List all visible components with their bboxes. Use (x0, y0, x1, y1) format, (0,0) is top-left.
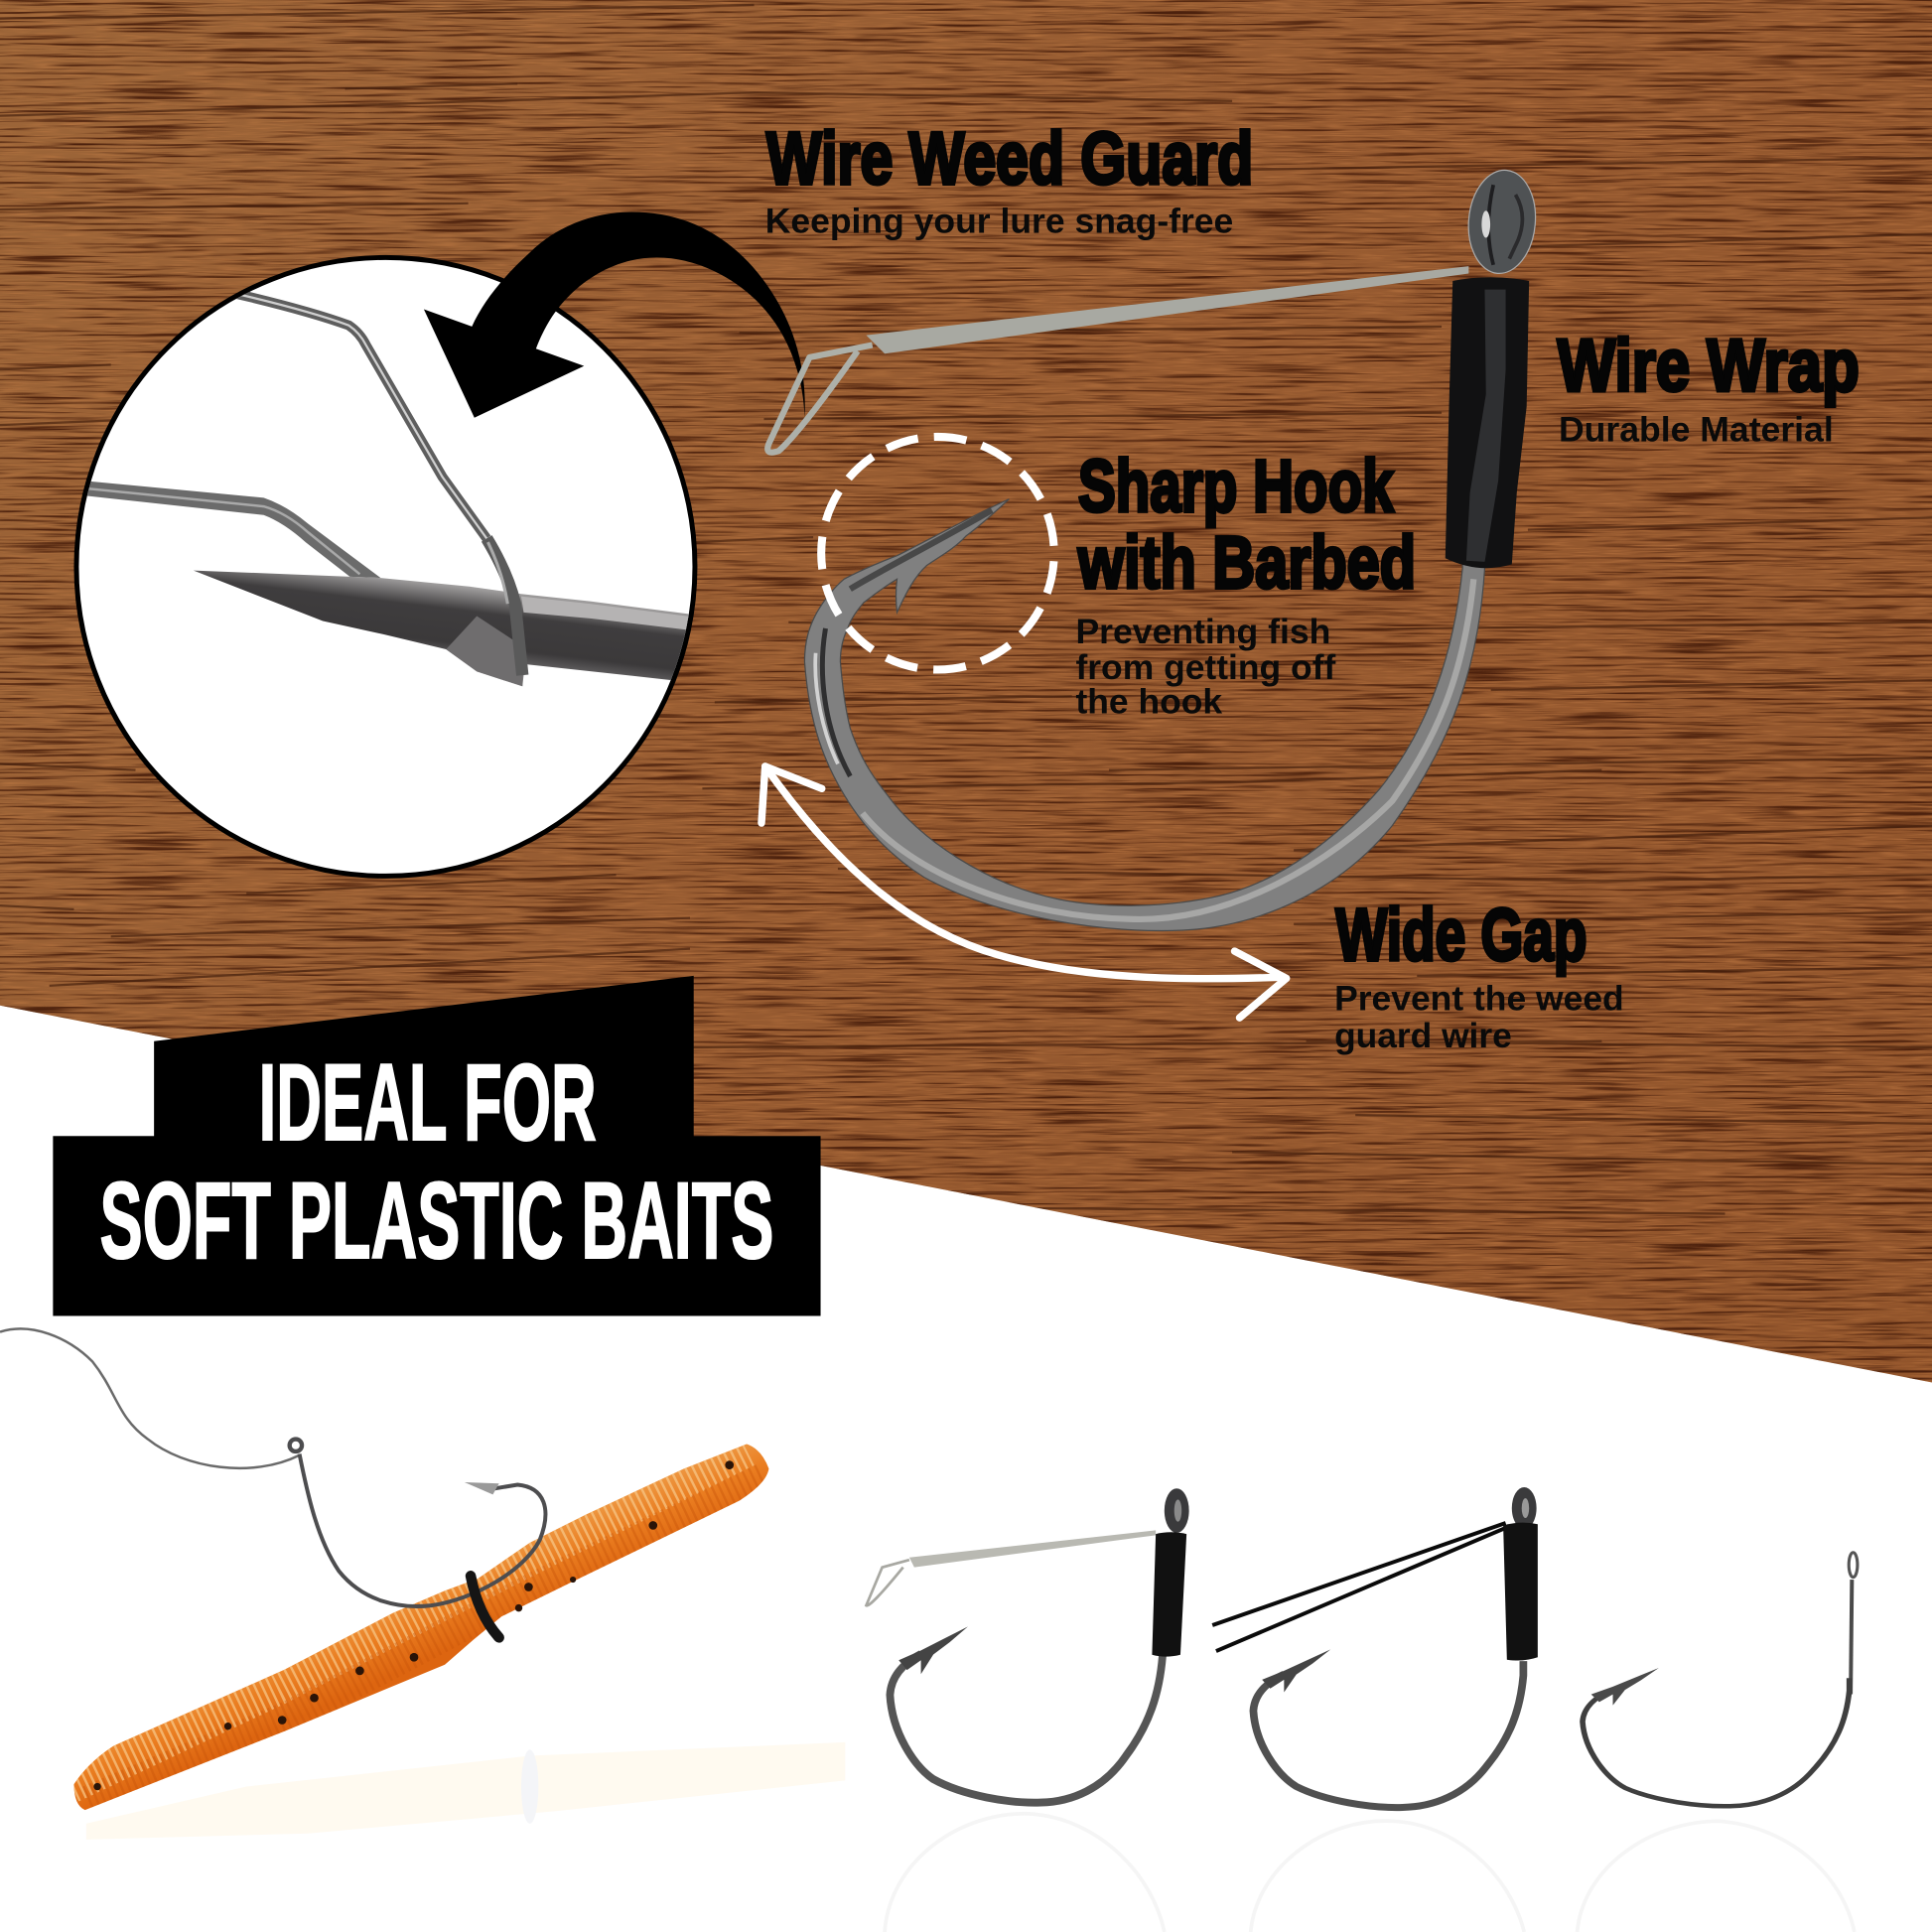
label: wide gap: Wide Gap (1335, 894, 1587, 976)
label: wide gap (1334, 894, 1624, 1055)
label: wide gap: guard wire (1334, 1017, 1512, 1055)
banner: ideal for soft plastic baits (53, 976, 821, 1315)
icon: hook bend (804, 499, 1484, 931)
white double-headed arrow: wide gap (761, 766, 1287, 1018)
label: sharp hook with barbed (1075, 445, 1416, 722)
label: sharp hook with barbed: the hook (1075, 683, 1222, 722)
icon: black wire wrap (1446, 277, 1529, 568)
main hook with wire weed guard (767, 168, 1540, 931)
label: wire weed guard (765, 117, 1253, 241)
icon: fishing line (0, 1328, 300, 1468)
icon: black o-ring (471, 1576, 499, 1637)
label: wire wrap (1558, 324, 1860, 449)
zoom circle: barb detail (76, 257, 696, 876)
label: wire wrap: Wire Wrap (1558, 324, 1860, 406)
big black curved arrow (424, 211, 805, 418)
label: sharp hook with barbed: Preventing fish (1075, 613, 1330, 651)
worm reflection (86, 1742, 845, 1840)
label: wire wrap: Durable Material (1559, 410, 1834, 449)
icon: orange soft plastic worm (65, 1445, 768, 1810)
product hook 3: plain hook (1583, 1553, 1858, 1806)
dashed circle highlighting barb (821, 437, 1054, 670)
icon: hook eye (1464, 168, 1540, 276)
product hook 1: wire guard (866, 1488, 1189, 1803)
icon: rigged hook (290, 1440, 545, 1606)
label: sharp hook with barbed: from getting off (1075, 648, 1336, 687)
worm lure on hook (0, 1328, 768, 1810)
banner: ideal for soft plastic baits: SOFT PLASTIC BAITS (100, 1161, 773, 1282)
wood background panel (0, 0, 1932, 1392)
label: wire weed guard: Wire Weed Guard (766, 117, 1253, 200)
label: wide gap: Prevent the weed (1334, 980, 1624, 1019)
label: wire weed guard: Keeping your lure snag-free (765, 203, 1233, 241)
product hook 2: fiber guard (1212, 1487, 1538, 1808)
banner: ideal for soft plastic baits: IDEAL FOR (259, 1042, 597, 1164)
label: sharp hook with barbed: Sharp Hook (1078, 445, 1394, 527)
hook reflections (885, 1814, 1855, 1932)
icon: wire weed guard (767, 266, 1468, 453)
label: sharp hook with barbed: with Barbed (1077, 521, 1416, 604)
